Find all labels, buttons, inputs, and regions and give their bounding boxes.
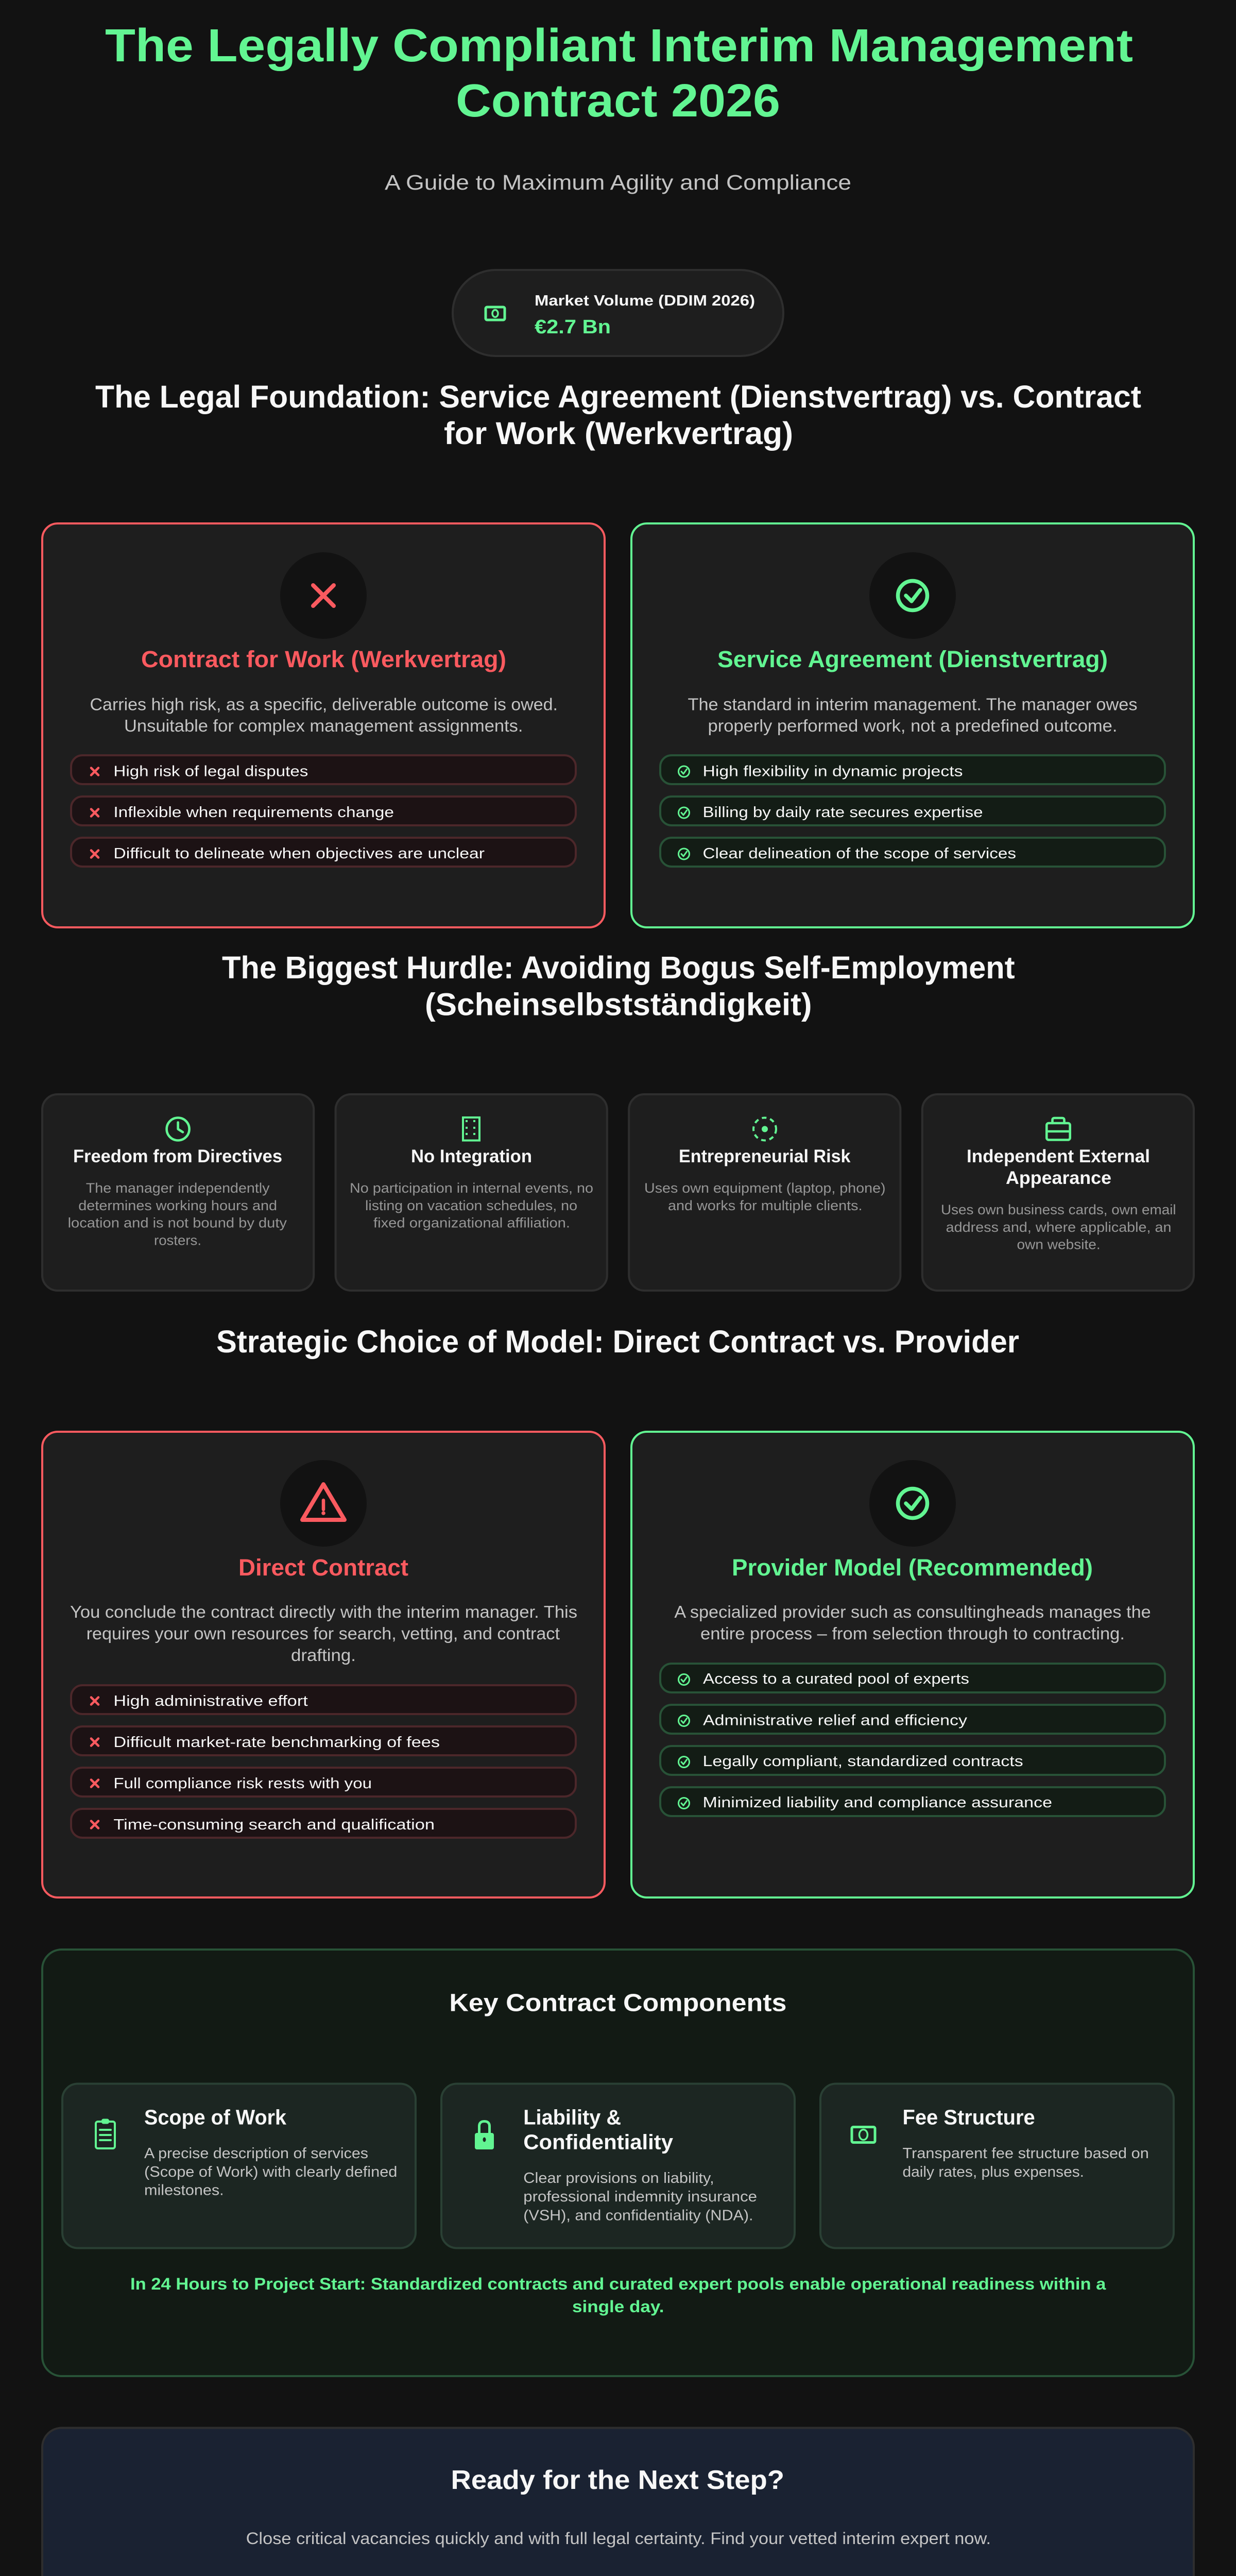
panel: direct contract [42, 1432, 605, 1897]
list item: Legally compliant, standardized contracts [702, 1753, 1023, 1770]
component description [144, 2145, 397, 2199]
cta heading: Ready for the Next Step? [451, 2465, 784, 2495]
card description [644, 1180, 886, 1213]
icon: dashed target [753, 1118, 776, 1141]
icon: warning triangle [280, 1460, 367, 1547]
panel heading: Direct Contract [238, 1554, 408, 1581]
list: drawbacks [71, 1685, 576, 1838]
component description: Transparent fee structure based on [902, 2145, 1149, 2162]
card description: location and is not bound by duty [68, 1215, 287, 1231]
list item: Access to a curated pool of experts [703, 1671, 969, 1687]
card heading: Entrepreneurial Risk [679, 1146, 851, 1166]
card description: rosters. [154, 1232, 201, 1248]
heading: legal foundation [95, 379, 1141, 451]
panel description: Unsuitable for complex management assignments. [124, 716, 523, 735]
card description: determines working hours and [78, 1198, 277, 1213]
card: no integration [336, 1094, 607, 1291]
list item: High flexibility in dynamic projects [702, 764, 963, 780]
list item: Difficult to delineate when objectives are unclear [113, 845, 485, 862]
panel description: entire process – from selection through to contracting. [700, 1624, 1125, 1643]
component description: (VSH), and confidentiality (NDA). [523, 2207, 753, 2224]
card heading: No Integration [411, 1146, 532, 1166]
icon: banknote [852, 2127, 875, 2142]
card: entrepreneurial risk [629, 1094, 900, 1291]
panel description [674, 1602, 1151, 1643]
component description: (Scope of Work) with clearly defined [144, 2164, 397, 2180]
card heading: Freedom from Directives [73, 1146, 282, 1166]
panel description: Carries high risk, as a specific, deliverable outcome is owed. [90, 694, 558, 714]
list item [660, 796, 1165, 825]
card heading [967, 1146, 1150, 1188]
icon: clipboard [96, 2120, 115, 2148]
list item [71, 1768, 576, 1797]
panel heading: Service Agreement (Dienstvertrag) [717, 646, 1108, 672]
list item: Clear delineation of the scope of services [702, 845, 1016, 862]
cta description: Close critical vacancies quickly and with full legal certainty. Find your vetted interim expert now. [246, 2529, 991, 2548]
subtitle: A Guide to Maximum Agility and Compliance [385, 171, 851, 194]
card heading: Appearance [1006, 1168, 1111, 1188]
list item: High administrative effort [113, 1693, 308, 1709]
card heading: Independent External [967, 1146, 1150, 1166]
list: drawbacks [71, 755, 576, 867]
component description [523, 2170, 757, 2224]
list item [660, 838, 1165, 867]
heading: biggest hurdle [222, 950, 1015, 1022]
title: Contract 2026 [456, 75, 780, 127]
panel description: drafting. [291, 1646, 356, 1665]
component description: professional indemnity insurance [523, 2189, 757, 2205]
component: liability and confidentiality [441, 2083, 795, 2248]
list item [71, 1685, 576, 1714]
list item [71, 1726, 576, 1755]
title [105, 20, 1133, 127]
list item [660, 1664, 1165, 1692]
list item [660, 755, 1165, 784]
component heading [523, 2105, 673, 2154]
component heading: Scope of Work [144, 2105, 286, 2129]
card description: Uses own business cards, own email [941, 1202, 1176, 1217]
card description [68, 1180, 287, 1248]
card: freedom from directives [42, 1094, 314, 1291]
card description: Uses own equipment (laptop, phone) [644, 1180, 886, 1196]
list item: High risk of legal disputes [113, 764, 308, 780]
panel heading: Contract for Work (Werkvertrag) [141, 646, 506, 672]
card description: fixed organizational affiliation. [373, 1215, 570, 1231]
heading: strategic choice: Strategic Choice of Model: Direct Contract vs. Provider [216, 1324, 1019, 1359]
panel description: You conclude the contract directly with the interim manager. This [70, 1602, 577, 1621]
stat value: €2.7 Bn [535, 316, 611, 338]
list item: Administrative relief and efficiency [703, 1713, 968, 1729]
callout: single day. [572, 2297, 664, 2316]
list item: Difficult market-rate benchmarking of fees [113, 1734, 440, 1751]
panel description: A specialized provider such as consultingheads manages the [674, 1602, 1151, 1621]
panel heading: Provider Model (Recommended) [732, 1554, 1093, 1581]
component heading: Confidentiality [523, 2130, 673, 2154]
icon: red cross [280, 552, 367, 639]
stat pill: market volume [453, 270, 783, 356]
list item: Inflexible when requirements change [113, 804, 394, 821]
icon: clock [167, 1118, 190, 1141]
list: benefits [660, 1664, 1165, 1816]
component description: Clear provisions on liability, [523, 2170, 714, 2187]
card description: The manager independently [86, 1180, 270, 1196]
list: benefits [660, 755, 1165, 867]
component heading: Liability & [523, 2105, 621, 2129]
title: The Legally Compliant Interim Management [105, 20, 1133, 72]
icon: green check [869, 552, 956, 639]
heading: biggest hurdle: (Scheinselbstständigkeit) [425, 987, 812, 1022]
heading: legal foundation: for Work (Werkvertrag) [444, 416, 793, 451]
panel: contract for work [42, 523, 605, 927]
card description: listing on vacation schedules, no [365, 1198, 577, 1213]
component description: milestones. [144, 2182, 224, 2199]
card description: address and, where applicable, an [946, 1219, 1171, 1235]
card description [941, 1202, 1176, 1252]
list item [660, 1705, 1165, 1734]
callout: In 24 Hours to Project Start: Standardized contracts and curated expert pools enable operational readiness within a [130, 2275, 1106, 2293]
icon: green check [869, 1460, 956, 1547]
card description: and works for multiple clients. [668, 1198, 862, 1213]
panel description [70, 1602, 577, 1665]
component description: daily rates, plus expenses. [902, 2164, 1084, 2180]
panel description [688, 694, 1137, 735]
card description: No participation in internal events, no [350, 1180, 593, 1196]
card description [350, 1180, 593, 1231]
icon: building [463, 1117, 479, 1141]
panel description [90, 694, 558, 735]
list item [71, 796, 576, 825]
list item: Full compliance risk rests with you [113, 1775, 372, 1792]
card: independent external appearance [922, 1094, 1194, 1291]
heading: legal foundation: The Legal Foundation: Service Agreement (Dienstvertrag) vs. Contract [95, 379, 1141, 414]
section heading: Key Contract Components [449, 1990, 786, 2017]
list item [71, 838, 576, 867]
card description: own website. [1017, 1236, 1101, 1252]
panel description: requires your own resources for search, vetting, and contract [87, 1624, 560, 1643]
list item: Minimized liability and compliance assurance [702, 1794, 1052, 1811]
component description: A precise description of services [144, 2145, 368, 2162]
panel description: The standard in interim management. The manager owes [688, 694, 1137, 714]
icon: padlock [475, 2122, 494, 2149]
component: fee structure [820, 2083, 1174, 2248]
component: scope of work [62, 2083, 416, 2248]
panel: key contract components [42, 1950, 1194, 2376]
list item [71, 1809, 576, 1838]
panel: call to action [42, 2428, 1194, 2576]
component heading: Fee Structure [902, 2105, 1035, 2129]
component description [902, 2145, 1149, 2180]
icon: briefcase [1046, 1118, 1070, 1140]
list item [71, 755, 576, 784]
list item [660, 1787, 1165, 1816]
callout [130, 2275, 1106, 2316]
panel: service agreement [631, 523, 1194, 927]
panel: provider model [631, 1432, 1194, 1897]
list item: Billing by daily rate secures expertise [702, 804, 983, 821]
heading: biggest hurdle: The Biggest Hurdle: Avoiding Bogus Self-Employment [222, 950, 1015, 985]
stat label: Market Volume (DDIM 2026) [535, 293, 755, 309]
list item [660, 1746, 1165, 1775]
panel description: properly performed work, not a predefined outcome. [708, 716, 1118, 735]
list item: Time-consuming search and qualification [113, 1817, 435, 1833]
icon: banknote [486, 307, 505, 320]
